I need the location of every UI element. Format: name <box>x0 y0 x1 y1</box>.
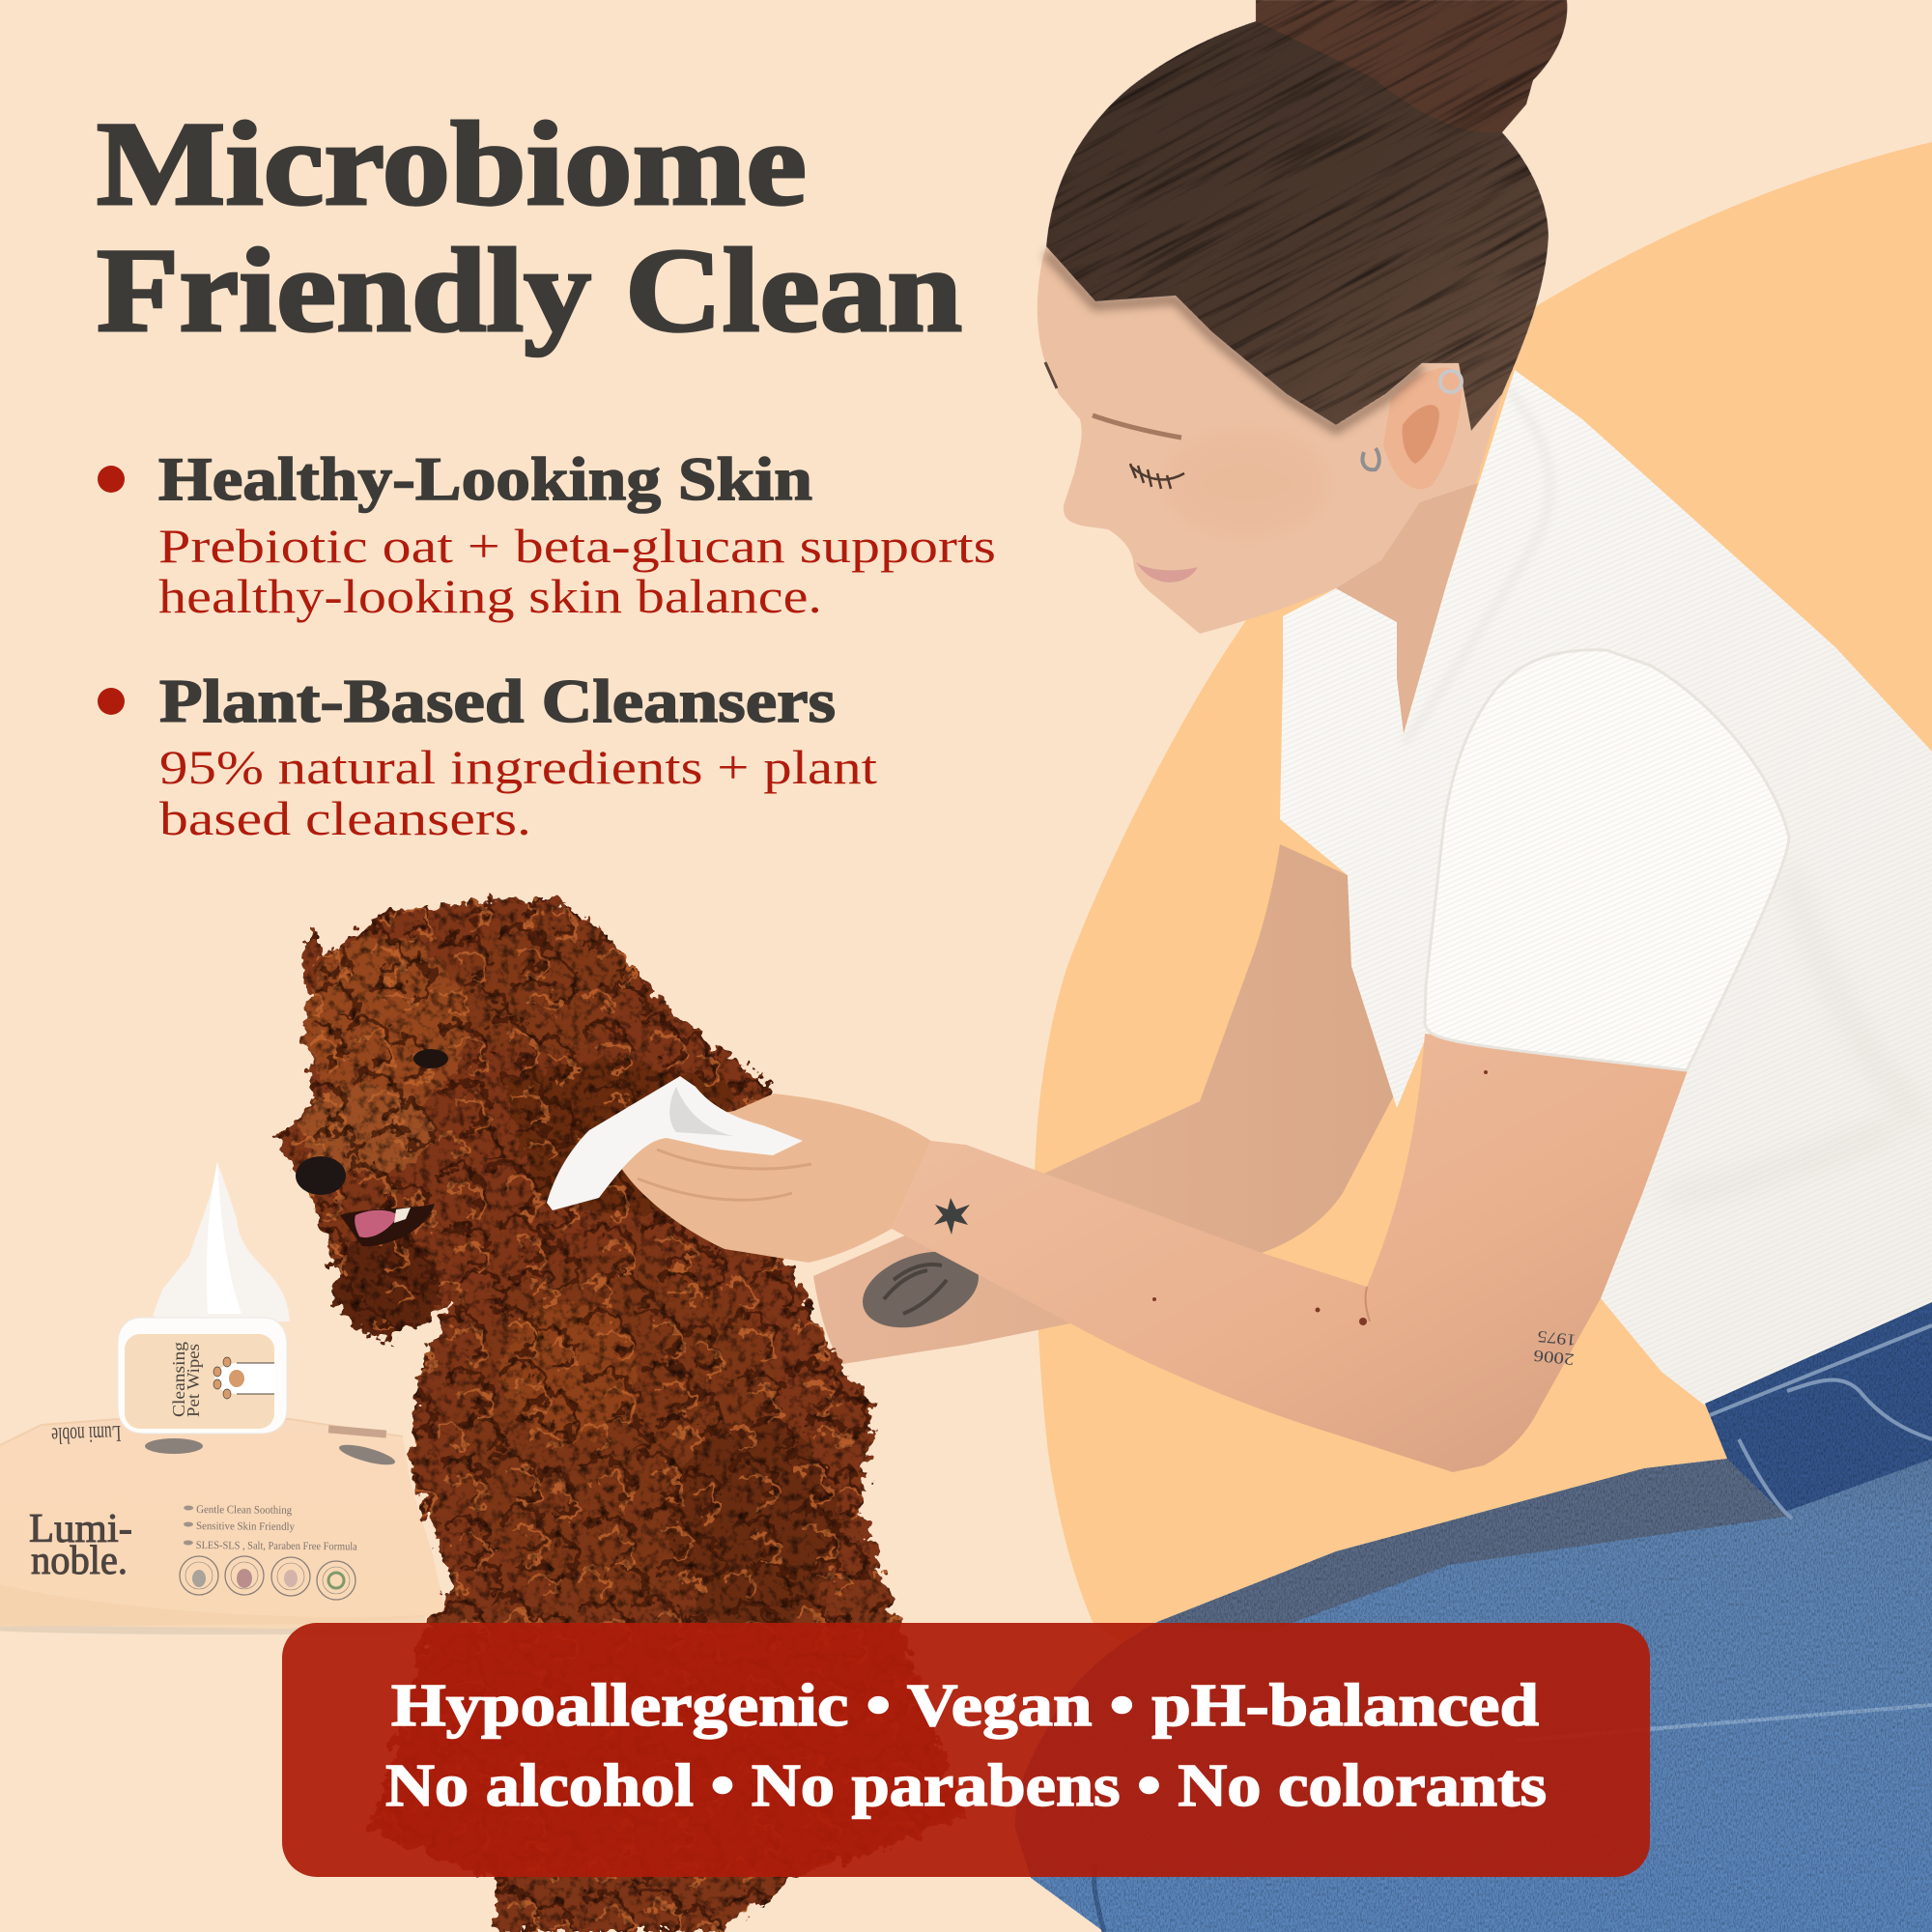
woman: jeans <box>1015 1302 1932 1932</box>
banner text <box>385 1673 1547 1819</box>
pack body <box>0 1419 446 1629</box>
hair bun <box>1256 0 1567 132</box>
woman: shirt sleeve <box>1425 650 1789 1070</box>
title <box>97 98 962 356</box>
benefit: healthy-looking skin: Healthy-Looking Skin <box>158 445 812 513</box>
woman: far arm <box>813 844 1394 1364</box>
banner <box>282 1623 1650 1877</box>
pack brand name: Lumi- <box>29 1507 132 1551</box>
benefit: plant-based cleansers: 95% natural ingredients + plant <box>159 740 877 794</box>
pack claims: Gentle Clean Soothing <box>196 1504 292 1517</box>
woman: hair <box>867 0 1746 647</box>
pack upside-down wordmark: Lumi noble <box>51 1420 122 1448</box>
tattoo: numbers on elbow <box>1533 1327 1577 1369</box>
pack brand name: noble. <box>31 1539 128 1583</box>
woman: earrings <box>1362 371 1462 469</box>
woman: near arm <box>892 1034 1690 1472</box>
title: Microbiome <box>97 98 807 230</box>
lid label <box>169 1342 203 1417</box>
lid label: Pet Wipes <box>184 1344 203 1417</box>
neck shadow <box>1336 483 1478 733</box>
wipe in hand <box>547 1076 803 1210</box>
dog <box>275 896 966 1932</box>
pack claims <box>184 1504 357 1552</box>
tattoo: lion <box>853 1238 988 1341</box>
benefit: plant-based cleansers: based cleansers. <box>159 791 531 845</box>
jeans waistband <box>1710 1325 1932 1519</box>
tattoo: numbers on elbow: 2006 <box>1533 1347 1575 1369</box>
pack top print <box>145 1425 397 1469</box>
benefit: healthy-looking skin: healthy-looking skin balance. <box>158 569 822 623</box>
pack brand name <box>29 1507 132 1583</box>
dog face <box>296 1049 448 1246</box>
pack badges <box>180 1556 355 1600</box>
banner text: Hypoallergenic • Vegan • pH-balanced <box>391 1673 1539 1739</box>
woman: shirt body <box>1280 370 1932 1406</box>
woman: ear <box>1383 368 1462 489</box>
orange arc shape <box>1035 142 1932 1739</box>
dispenser lid <box>118 1318 287 1434</box>
lid paw icon <box>213 1357 274 1399</box>
title: Friendly Clean <box>97 224 962 356</box>
benefit: healthy-looking skin <box>98 445 996 623</box>
arm moles and crease <box>1152 1070 1488 1325</box>
banner text: No alcohol • No parabens • No colorants <box>385 1753 1547 1819</box>
wipe popping out <box>153 1162 290 1321</box>
lid label: Cleansing <box>169 1342 188 1417</box>
woman: head and neck skin <box>1037 242 1502 733</box>
benefit: plant-based cleansers: Plant-Based Cleansers <box>159 668 836 735</box>
tattoo: leaf on wrist <box>934 1198 970 1235</box>
woman: facial features <box>1045 362 1198 582</box>
benefit: plant-based cleansers <box>98 668 877 845</box>
cheek tone <box>1164 430 1328 536</box>
tattoo: numbers on elbow: 1975 <box>1537 1327 1577 1350</box>
pack claims: Sensitive Skin Friendly <box>196 1520 295 1533</box>
product: pet wipes package <box>0 1162 464 1634</box>
woman: hand <box>621 1094 931 1263</box>
pack claims: SLES-SLS , Salt, Paraben Free Formula <box>196 1540 357 1552</box>
benefit: healthy-looking skin: Prebiotic oat + beta-glucan supports <box>158 519 996 573</box>
